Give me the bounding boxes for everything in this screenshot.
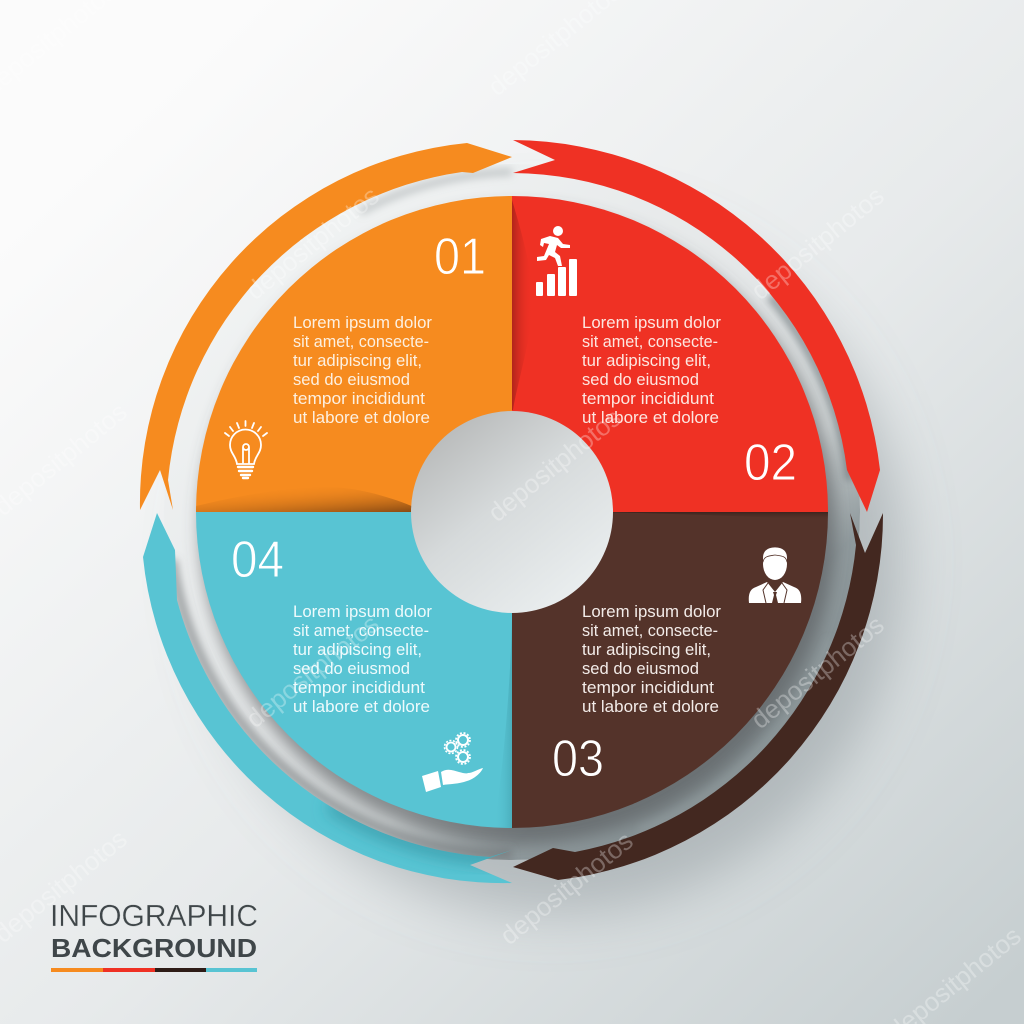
- panel 03: brown: [512, 512, 828, 828]
- text block 02: [582, 314, 722, 427]
- text block 04: sed do eiusmod: [293, 660, 410, 678]
- text block 04: ut labore et dolore: [293, 698, 430, 716]
- title: [50, 898, 258, 963]
- watermarks: depositphotos: [482, 402, 627, 528]
- text block 03: sit amet, consecte-: [582, 622, 718, 640]
- number 02: 02: [744, 434, 797, 492]
- title: INFOGRAPHIC: [50, 898, 258, 933]
- watermarks: depositphotos: [494, 825, 639, 951]
- text block 01: tempor incididunt: [293, 390, 425, 408]
- text block 03: sed do eiusmod: [582, 660, 699, 678]
- text block 01: tur adipiscing elit,: [293, 352, 422, 370]
- text block 02: ut labore et dolore: [582, 409, 719, 427]
- text block 04: sit amet, consecte-: [293, 622, 429, 640]
- icon: runner on bars: [536, 226, 577, 296]
- title: BACKGROUND: [51, 933, 257, 963]
- panel 04: teal: [196, 512, 512, 828]
- text block 03: tempor incididunt: [582, 679, 714, 697]
- watermarks: depositphotos: [240, 180, 385, 306]
- number 04: 04: [231, 531, 284, 589]
- panel 02: red: [512, 196, 828, 512]
- watermarks: depositphotos: [240, 608, 385, 734]
- text block 02: tempor incididunt: [582, 390, 714, 408]
- text block 02: Lorem ipsum dolor: [582, 314, 722, 332]
- text block 03: tur adipiscing elit,: [582, 641, 711, 659]
- number 01: 01: [434, 228, 486, 286]
- text block 01: sed do eiusmod: [293, 371, 410, 389]
- text block 01: ut labore et dolore: [293, 409, 430, 427]
- panel 01: orange: [196, 196, 512, 512]
- text block 03: Lorem ipsum dolor: [582, 603, 722, 621]
- text block 01: sit amet, consecte-: [293, 333, 429, 351]
- icon: business person: [749, 547, 801, 603]
- text block 04: tempor incididunt: [293, 679, 425, 697]
- ring arrow: orange: [140, 143, 512, 510]
- text block 03: ut labore et dolore: [582, 698, 719, 716]
- light ring behind pie: [164, 164, 860, 860]
- text block 04: Lorem ipsum dolor: [293, 603, 433, 621]
- watermarks: depositphotos: [745, 180, 890, 306]
- text block 02: tur adipiscing elit,: [582, 352, 711, 370]
- text block 01: Lorem ipsum dolor: [293, 314, 433, 332]
- watermarks: depositphotos: [745, 609, 890, 735]
- ring arrow: teal: [143, 513, 512, 883]
- number 03: 03: [552, 730, 604, 788]
- ring arrow: brown: [513, 513, 883, 880]
- text block 04: [293, 603, 433, 716]
- text block 03: [582, 603, 722, 716]
- ring arrow: red: [513, 140, 880, 512]
- text block 02: sed do eiusmod: [582, 371, 699, 389]
- text block 04: tur adipiscing elit,: [293, 641, 422, 659]
- text block 02: sit amet, consecte-: [582, 333, 718, 351]
- text block 01: [293, 314, 433, 427]
- icon: gears on hand: [422, 733, 483, 792]
- icon: light bulb: [225, 421, 267, 478]
- center hole: [411, 411, 613, 613]
- title color bar: [51, 968, 257, 972]
- drop shadow of wheel: [200, 210, 904, 914]
